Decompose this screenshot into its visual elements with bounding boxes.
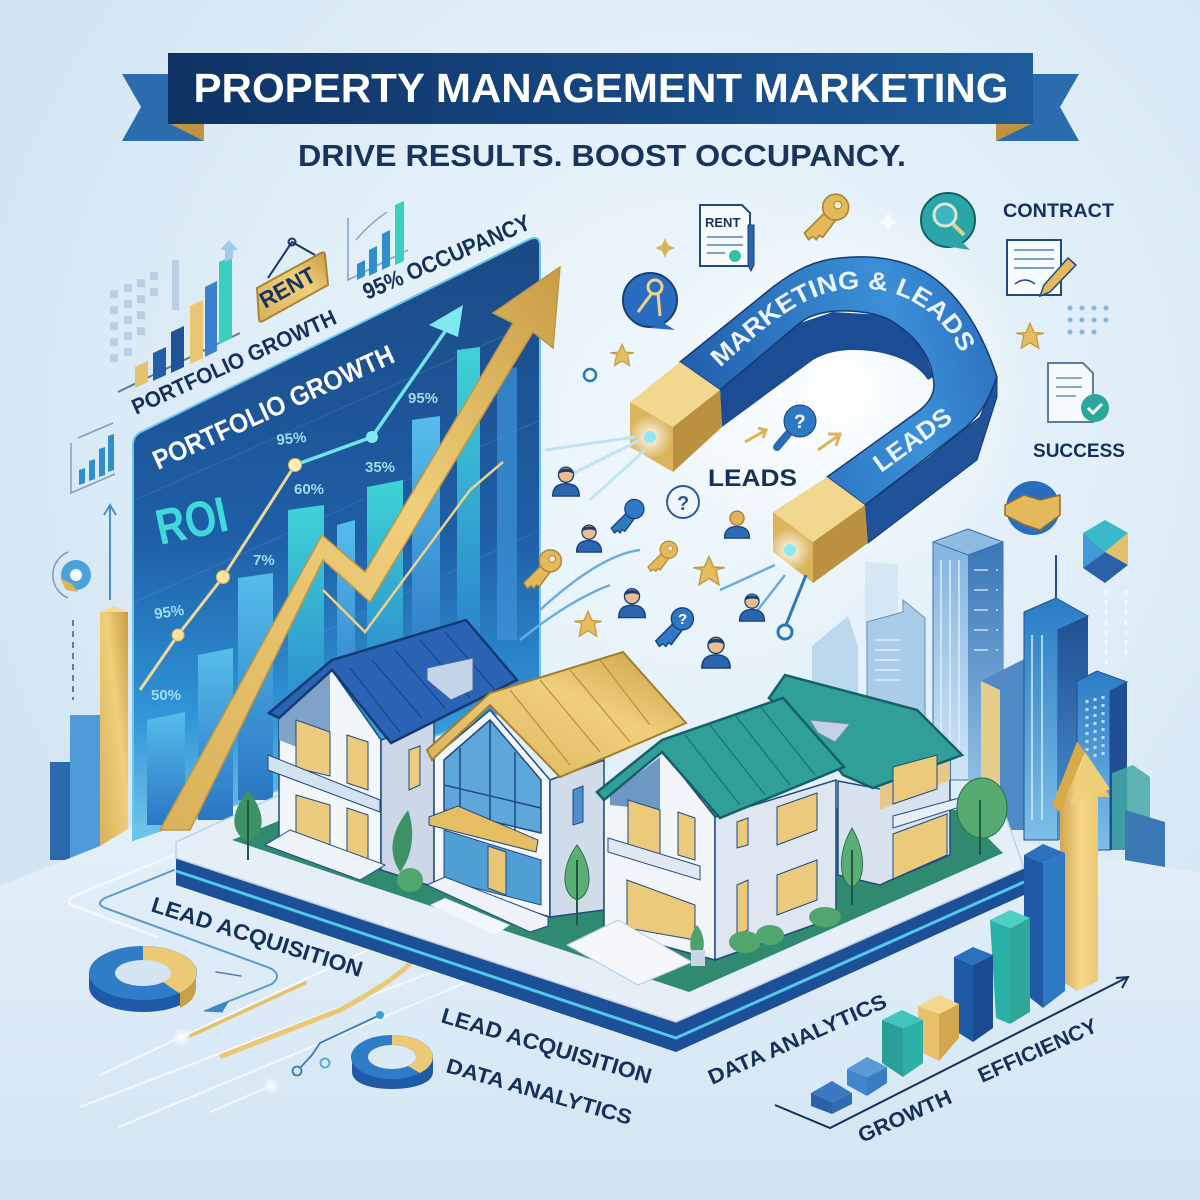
- rent sign: RENT: [255, 262, 320, 313]
- panel: ROI chart: 95%: [276, 429, 307, 449]
- rent sign: [255, 238, 328, 322]
- icon: contract document: [1007, 240, 1076, 296]
- bottom labels: [148, 892, 1101, 1148]
- panel: ROI chart: 95%: [153, 602, 185, 623]
- label: success: SUCCESS: [1033, 441, 1125, 462]
- magnet: [630, 256, 998, 583]
- gold growth arrow: [160, 267, 560, 830]
- ground plane: [0, 760, 1200, 1200]
- back teal house: [769, 675, 963, 885]
- magnet top band: [680, 257, 997, 505]
- teal front house: [567, 698, 844, 985]
- blue house: [265, 620, 517, 887]
- panel: ROI chart: 50%: [151, 687, 181, 704]
- label: lead acquisition upper: LEAD ACQUISITION: [148, 892, 366, 982]
- panel: ROI chart: ROI: [151, 486, 233, 556]
- panel: ROI chart: 60%: [294, 481, 324, 498]
- attraction icons: ?: [677, 493, 689, 515]
- left pole: [630, 362, 722, 472]
- donut chart left: [89, 946, 197, 1012]
- title banner: [122, 53, 1079, 141]
- magnet: MARKETING & LEADS: [710, 272, 974, 366]
- lower-right bar chart with arrow: [775, 742, 1128, 1128]
- magnet label arc: [720, 289, 966, 368]
- top-left chart: portfolio growth: [110, 240, 240, 392]
- gold house: [427, 652, 686, 935]
- left buildings and mini icons: [50, 423, 128, 860]
- panel: ROI chart: 95%: [408, 390, 438, 407]
- flow lines: [69, 855, 465, 1127]
- panel: ROI chart: 7%: [253, 552, 275, 569]
- label: efficiency: EFFICIENCY: [975, 1014, 1101, 1088]
- panel: ROI chart: 35%: [365, 459, 395, 476]
- inner wall: [720, 312, 933, 427]
- icon: rent document: [700, 205, 754, 271]
- label: data analytics right: DATA ANALYTICS: [705, 990, 890, 1090]
- right pole: [773, 477, 868, 583]
- icon: magnifier bubble: [921, 193, 975, 250]
- label: contract: CONTRACT: [1003, 201, 1114, 222]
- label: 95% occupancy: 95% OCCUPANCY: [359, 209, 534, 305]
- platform: [176, 790, 1024, 1052]
- title text: PROPERTY MANAGEMENT MARKETING: [194, 65, 1008, 111]
- attraction icons: ?: [794, 412, 806, 433]
- icon: success document: [1048, 363, 1109, 422]
- label: portfolio growth outer: PORTFOLIO GROWTH: [128, 305, 340, 420]
- mini chart top: [348, 201, 408, 280]
- icon: rent document: RENT: [705, 215, 740, 230]
- small chart icon: [71, 423, 115, 493]
- icon: handshake: [1005, 481, 1060, 535]
- line trend: [140, 305, 503, 690]
- gold arrow: [1052, 742, 1110, 991]
- attraction icons: ?: [678, 611, 687, 628]
- label: data analytics left: DATA ANALYTICS: [444, 1055, 635, 1130]
- background skyscrapers: [812, 529, 1165, 867]
- icon: gold key: [804, 194, 849, 240]
- donut chart center: [351, 1035, 433, 1089]
- bars: [811, 844, 1065, 1114]
- attraction icons: [520, 212, 1044, 668]
- label: lead acquisition lower: LEAD ACQUISITION: [439, 1003, 655, 1089]
- subtitle: DRIVE RESULTS. BOOST OCCUPANCY.: [298, 138, 906, 173]
- target icon: [53, 552, 91, 598]
- icon: hexagon cube: [1083, 520, 1128, 583]
- icon: key bubble: [623, 273, 677, 330]
- magnet outer side: [865, 377, 997, 543]
- trees and shrubs: [234, 778, 1007, 966]
- label: growth: GROWTH: [855, 1086, 955, 1148]
- label: leads: LEADS: [708, 465, 797, 492]
- magnet label lower: LEADS: [868, 402, 957, 478]
- dot grid: [1068, 306, 1108, 334]
- bars: [147, 347, 517, 825]
- panel: ROI chart: [133, 238, 540, 840]
- panel labels: PORTFOLIO GROWTH: [148, 340, 399, 475]
